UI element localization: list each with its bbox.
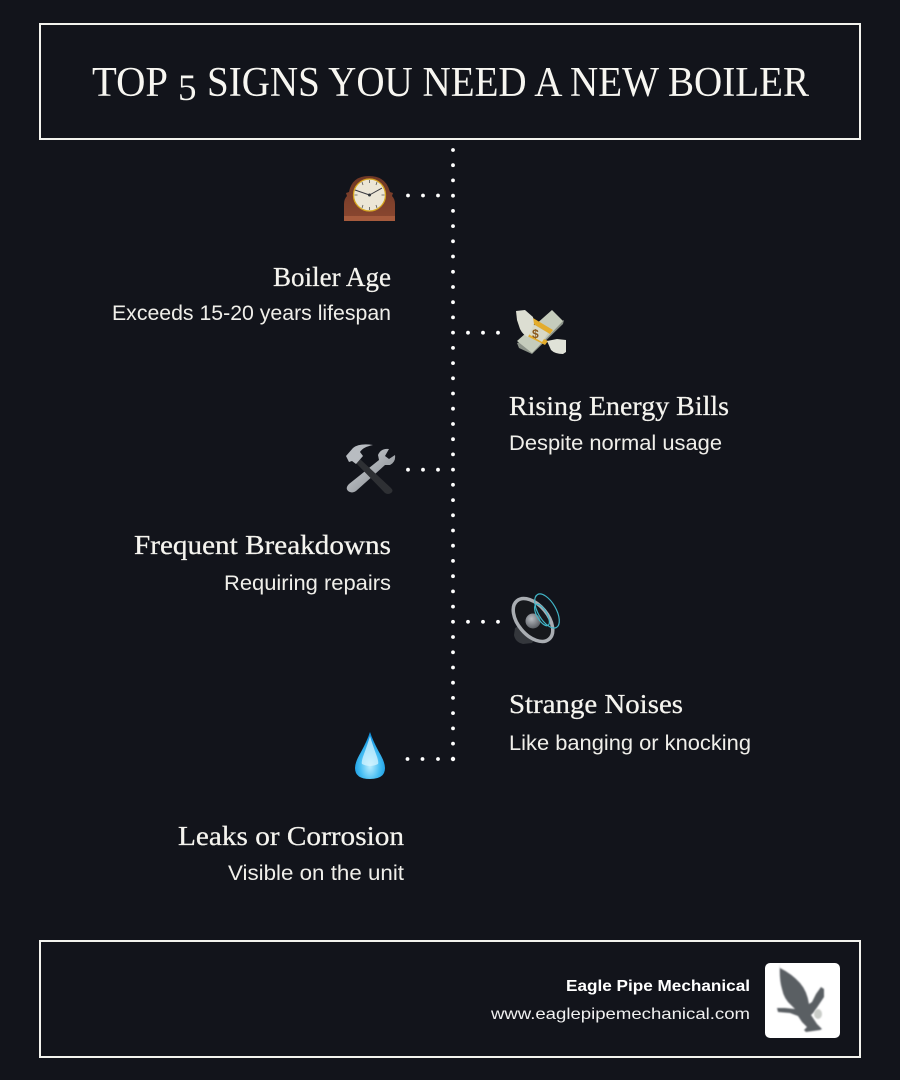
title: TOP (92, 60, 168, 106)
text: rising energy bills (509, 391, 729, 455)
icon: hammer and wrench (346, 444, 395, 494)
website: www.eaglepipemechanical.com (490, 1006, 750, 1023)
text: rising energy bills: Rising Energy Bills (509, 391, 729, 421)
title: SIGNS YOU NEED A NEW BOILER (207, 60, 809, 106)
dotted timeline (406, 148, 500, 761)
icon: speaker (505, 590, 564, 649)
text: frequent breakdowns: Frequent Breakdowns (134, 530, 391, 560)
text: leaks or corrosion: Visible on the unit (228, 862, 404, 885)
title box (40, 24, 860, 139)
text: strange noises: Like banging or knocking (509, 732, 751, 755)
text: frequent breakdowns: Requiring repairs (224, 572, 391, 595)
icon: water drop (355, 732, 385, 779)
text: boiler age: Boiler Age (273, 262, 391, 292)
text: strange noises (509, 689, 751, 755)
text: boiler age: Exceeds 15-20 years lifespan (112, 302, 391, 325)
text: leaks or corrosion (178, 821, 405, 885)
icon: money with wings (516, 310, 566, 354)
logo: eagle (765, 963, 840, 1038)
text: frequent breakdowns (134, 530, 391, 595)
text: boiler age (112, 262, 391, 325)
icon: mantel clock (344, 176, 395, 221)
icon: money with wings: $ (532, 327, 539, 341)
text: leaks or corrosion: Leaks or Corrosion (178, 821, 405, 851)
text: strange noises: Strange Noises (509, 689, 683, 719)
text: rising energy bills: Despite normal usage (509, 432, 722, 455)
title: 5 (178, 68, 196, 109)
company name: Eagle Pipe Mechanical (566, 978, 750, 995)
footer box (40, 941, 860, 1057)
